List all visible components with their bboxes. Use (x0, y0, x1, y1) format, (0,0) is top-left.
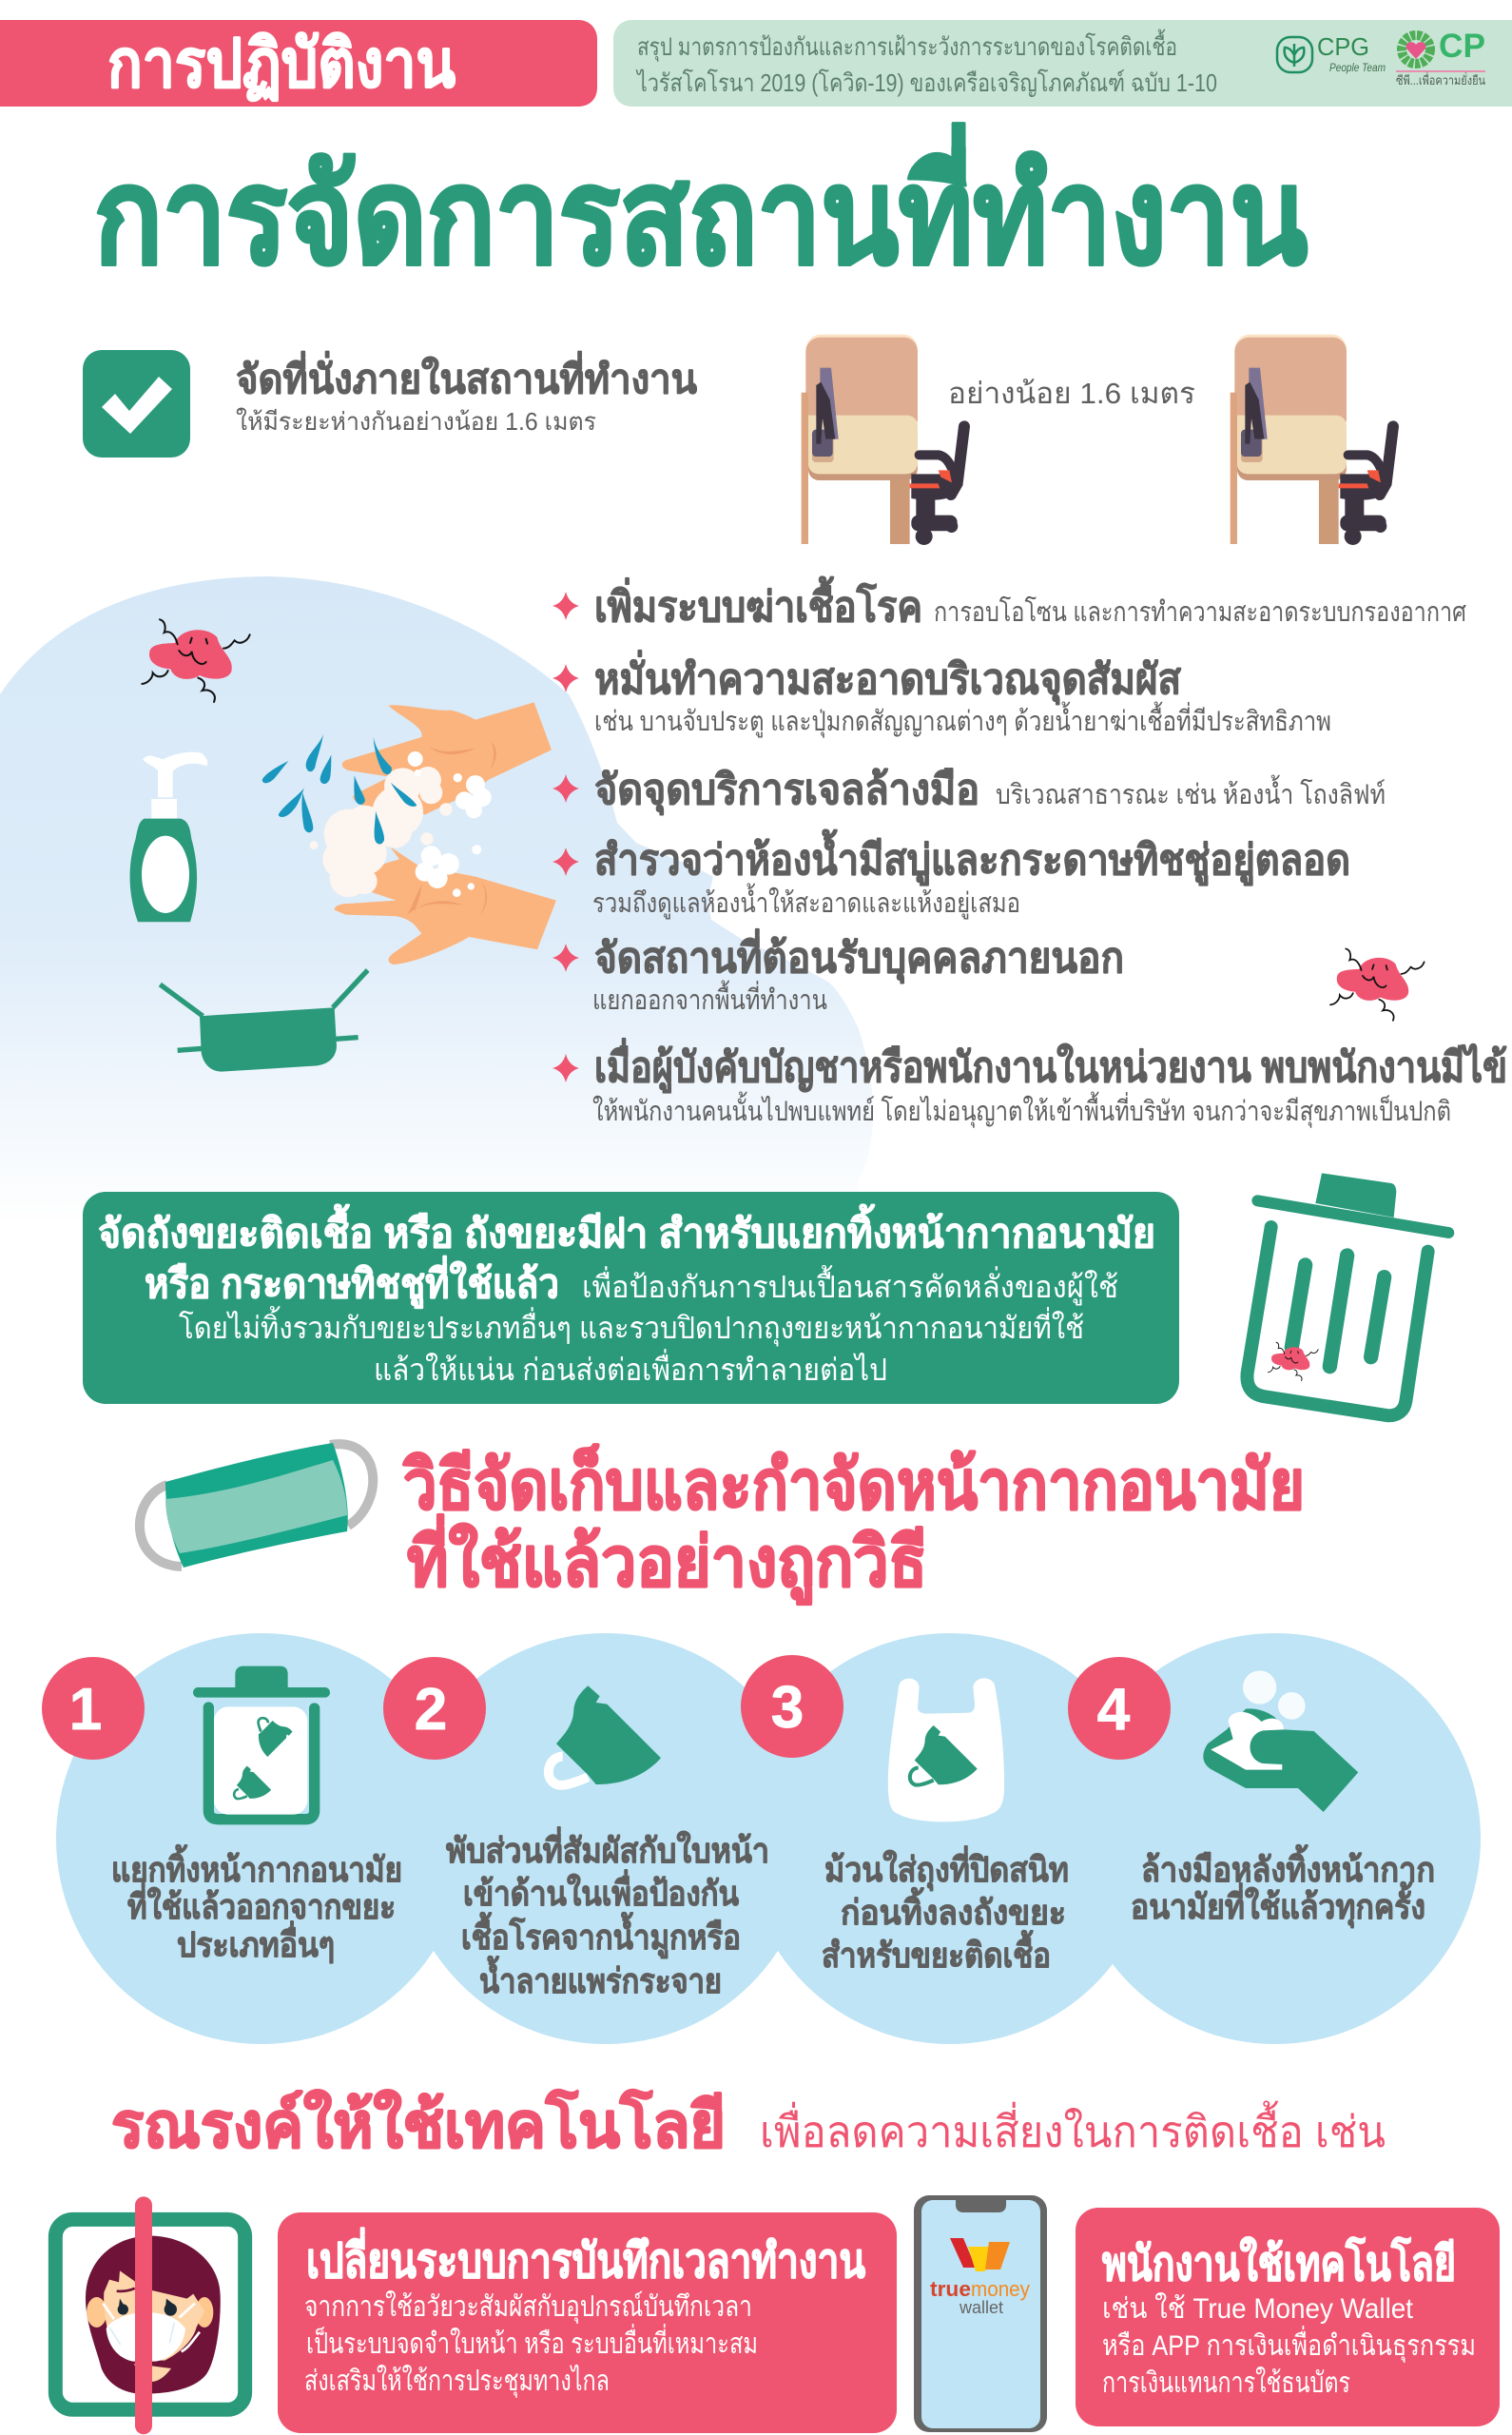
text (822, 1845, 1069, 1975)
panel: employee technology: การเงินแทนการใช้ธนบัตร (1102, 2367, 1350, 2399)
item: restroom supplies: รวมถึงดูแลห้องน้ำให้สะอาดและแห้งอยู่เสมอ (592, 883, 1020, 920)
text: พับส่วนที่สัมผัสกับใบหน้า (446, 1826, 769, 1870)
logo: true money: true (930, 2277, 971, 2301)
logo: CP sustainability: ซีพี...เพื่อความยั่งยืน (1396, 72, 1485, 88)
badge 1 (42, 1657, 145, 1760)
text: เข้าด้านในเพื่อป้องกัน (463, 1869, 739, 1913)
step 4: wash hands (1068, 1657, 1435, 1929)
badge 3: 3 (771, 1675, 804, 1741)
background blob (0, 576, 873, 1227)
item: visitor reception: แยกออกจากพื้นที่ทำงาน (592, 980, 827, 1016)
item: fever response (552, 1038, 1507, 1128)
illustration: desk left (802, 335, 964, 545)
panel: infectious waste bin: โดยไม่ทิ้งรวมกับขยะประเภทอื่นๆ และรวบปิดปากถุงขยะหน้ากากอนามัยที่ใช้ (179, 1306, 1084, 1347)
text: ที่ใช้แล้วออกจากขยะ (127, 1882, 396, 1926)
title: การจัดการสถานที่ทำงาน (94, 123, 1308, 291)
item: visitor reception (552, 928, 1124, 1016)
text: ม้วนใส่ถุงที่ปิดสนิท (824, 1845, 1069, 1892)
panel: infectious waste bin: จัดถังขยะติดเชื้อ หรือ ถังขยะมีฝา สำหรับแยกทิ้งหน้ากากอนามัย (98, 1203, 1155, 1256)
panel: time attendance: เปลี่ยนระบบการบันทึกเวลาทำงาน (306, 2228, 865, 2288)
item: clean touch points: เช่น บานจับประตู และปุ่มกดสัญญาณต่างๆ ด้วยน้ำยาฆ่าเชื้อที่มีประสิทธิภาพ (594, 701, 1331, 738)
panel: infectious waste bin (83, 1192, 1179, 1404)
text: เชื้อโรคจากน้ำมูกหรือ (461, 1912, 741, 1959)
seating heading: ให้มีระยะห่างกันอย่างน้อย 1.6 เมตร (236, 407, 596, 436)
logo: CPG: CPG (1317, 32, 1369, 61)
header: summary banner (613, 20, 1512, 107)
header: summary banner: สรุป มาตรการป้องกันและการเฝ้าระวังการระบาดของโรคติดเชื้อ (637, 29, 1177, 62)
item: disinfection system (552, 575, 1466, 631)
seating heading (236, 351, 697, 436)
icon: germ in bin (1268, 1342, 1318, 1381)
panel: time attendance (278, 2212, 897, 2433)
heading: promote technology (111, 2088, 1386, 2160)
panel: time attendance: จากการใช้อวัยวะสัมผัสกับอุปกรณ์บันทึกเวลา (304, 2290, 752, 2325)
item: disinfection system: เพิ่มระบบฆ่าเชื้อโรค (594, 575, 922, 631)
steps: background circles (56, 1633, 1481, 2044)
text (111, 1844, 402, 1964)
icon: bin with masks (198, 1666, 325, 1820)
header: summary banner: ไวรัสโคโรนา 2019 (โควิด-19) ของเครือเจริญโภคภัณฑ์ ฉบับ 1-10 (635, 68, 1217, 97)
panel: infectious waste bin: เพื่อป้องกันการปนเปื้อนสารคัดหลั่งของผู้ใช้ (582, 1265, 1118, 1306)
distance label: อย่างน้อย 1.6 เมตร (948, 377, 1195, 410)
item: hand gel points: จัดจุดบริการเจลล้างมือ (594, 767, 979, 816)
list: hygiene measures (552, 575, 1507, 1128)
heading: mask disposal: วิธีจัดเก็บและกำจัดหน้ากากอนามัย (402, 1444, 1305, 1524)
panel: time attendance: ส่งเสริมให้ใช้การประชุมทางไกล (304, 2364, 610, 2399)
logo: true money: wallet (959, 2298, 1003, 2317)
text (1131, 1844, 1435, 1929)
badge 2 (383, 1657, 486, 1760)
step 3: plastic bag (741, 1655, 1069, 1975)
item: clean touch points (552, 650, 1331, 738)
badge 4 (1068, 1657, 1171, 1760)
panel: time attendance: เป็นระบบจดจำใบหน้า หรือ ระบบอื่นที่เหมาะสม (306, 2324, 758, 2360)
illustration: face mask (160, 970, 368, 1072)
item: visitor reception: จัดสถานที่ต้อนรับบุคคลภายนอก (594, 928, 1124, 984)
icon: trash bin (1247, 1173, 1448, 1415)
illustration: germ right (1330, 948, 1425, 1021)
item: restroom supplies (552, 828, 1350, 920)
panel: infectious waste bin: แล้วให้แน่น ก่อนส่งต่อเพื่อการทำลายต่อไป (374, 1349, 887, 1387)
heading: promote technology: รณรงค์ให้ใช้เทคโนโลยี (111, 2088, 726, 2160)
logo: CP sustainability: CP (1439, 28, 1485, 65)
header: pink badge (0, 20, 597, 107)
illustration: germ (142, 619, 250, 702)
logo: true money (930, 2238, 1030, 2317)
heading: promote technology: เพื่อลดความเสี่ยงในการติดเชื้อ เช่น (760, 2100, 1386, 2156)
panel: infectious waste bin: หรือ กระดาษทิชชูที่ใช้แล้ว (145, 1256, 559, 1309)
icon: phone with wallet app (914, 2195, 1047, 2432)
text: ประเภทอื่นๆ (177, 1920, 335, 1964)
item: hand gel points: บริเวณสาธารณะ เช่น ห้องน้ำ โถงลิฟท์ (996, 774, 1386, 810)
text: น้ำลายแพร่กระจาย (479, 1956, 722, 2000)
text: อนามัยที่ใช้แล้วทุกครั้ง (1131, 1881, 1425, 1929)
text: สำหรับขยะติดเชื้อ (822, 1930, 1051, 1975)
text: ก่อนทิ้งลงถังขยะ (841, 1887, 1066, 1932)
panel: employee technology: เช่น ใช้ True Money Wallet (1102, 2292, 1414, 2325)
badge 1: 1 (69, 1677, 102, 1743)
logo: CPG (1277, 32, 1386, 74)
logo: CP sustainability (1396, 28, 1485, 88)
badge 4: 4 (1097, 1677, 1131, 1743)
badge 3 (741, 1655, 843, 1758)
icon: bag with mask (888, 1678, 1004, 1821)
heading: mask disposal (402, 1444, 1305, 1606)
icon: no touch face frame (55, 2196, 245, 2434)
icon: surgical mask (140, 1443, 373, 1568)
heading: mask disposal: ที่ใช้แล้วอย่างถูกวิธี (407, 1513, 927, 1606)
text (446, 1826, 769, 2000)
logo: CPG: People Team (1329, 61, 1386, 74)
step 2: fold mask (383, 1657, 769, 2000)
icon: washing hands (1203, 1670, 1358, 1812)
illustration: desk right (1231, 335, 1393, 545)
icon: check box (83, 350, 190, 458)
logo: true money: money (971, 2277, 1030, 2301)
illustration: soap bottle (130, 752, 207, 922)
item: clean touch points: หมั่นทำความสะอาดบริเวณจุดสัมผัส (594, 650, 1181, 706)
header: pink badge: การปฏิบัติงาน (107, 27, 456, 102)
text: แยกทิ้งหน้ากากอนามัย (111, 1844, 402, 1889)
step 1: separate mask (42, 1657, 402, 1964)
item: restroom supplies: สำรวจว่าห้องน้ำมีสบู่และกระดาษทิชชู่อยู่ตลอด (594, 828, 1350, 886)
seating heading: จัดที่นั่งภายในสถานที่ทำงาน (236, 351, 697, 401)
text: ล้างมือหลังทิ้งหน้ากาก (1141, 1844, 1435, 1889)
item: hand gel points (552, 767, 1386, 816)
panel: employee technology (1076, 2208, 1500, 2426)
illustration: washing hands (262, 702, 556, 964)
icon: folded mask (549, 1685, 661, 1785)
badge 2: 2 (415, 1677, 447, 1743)
